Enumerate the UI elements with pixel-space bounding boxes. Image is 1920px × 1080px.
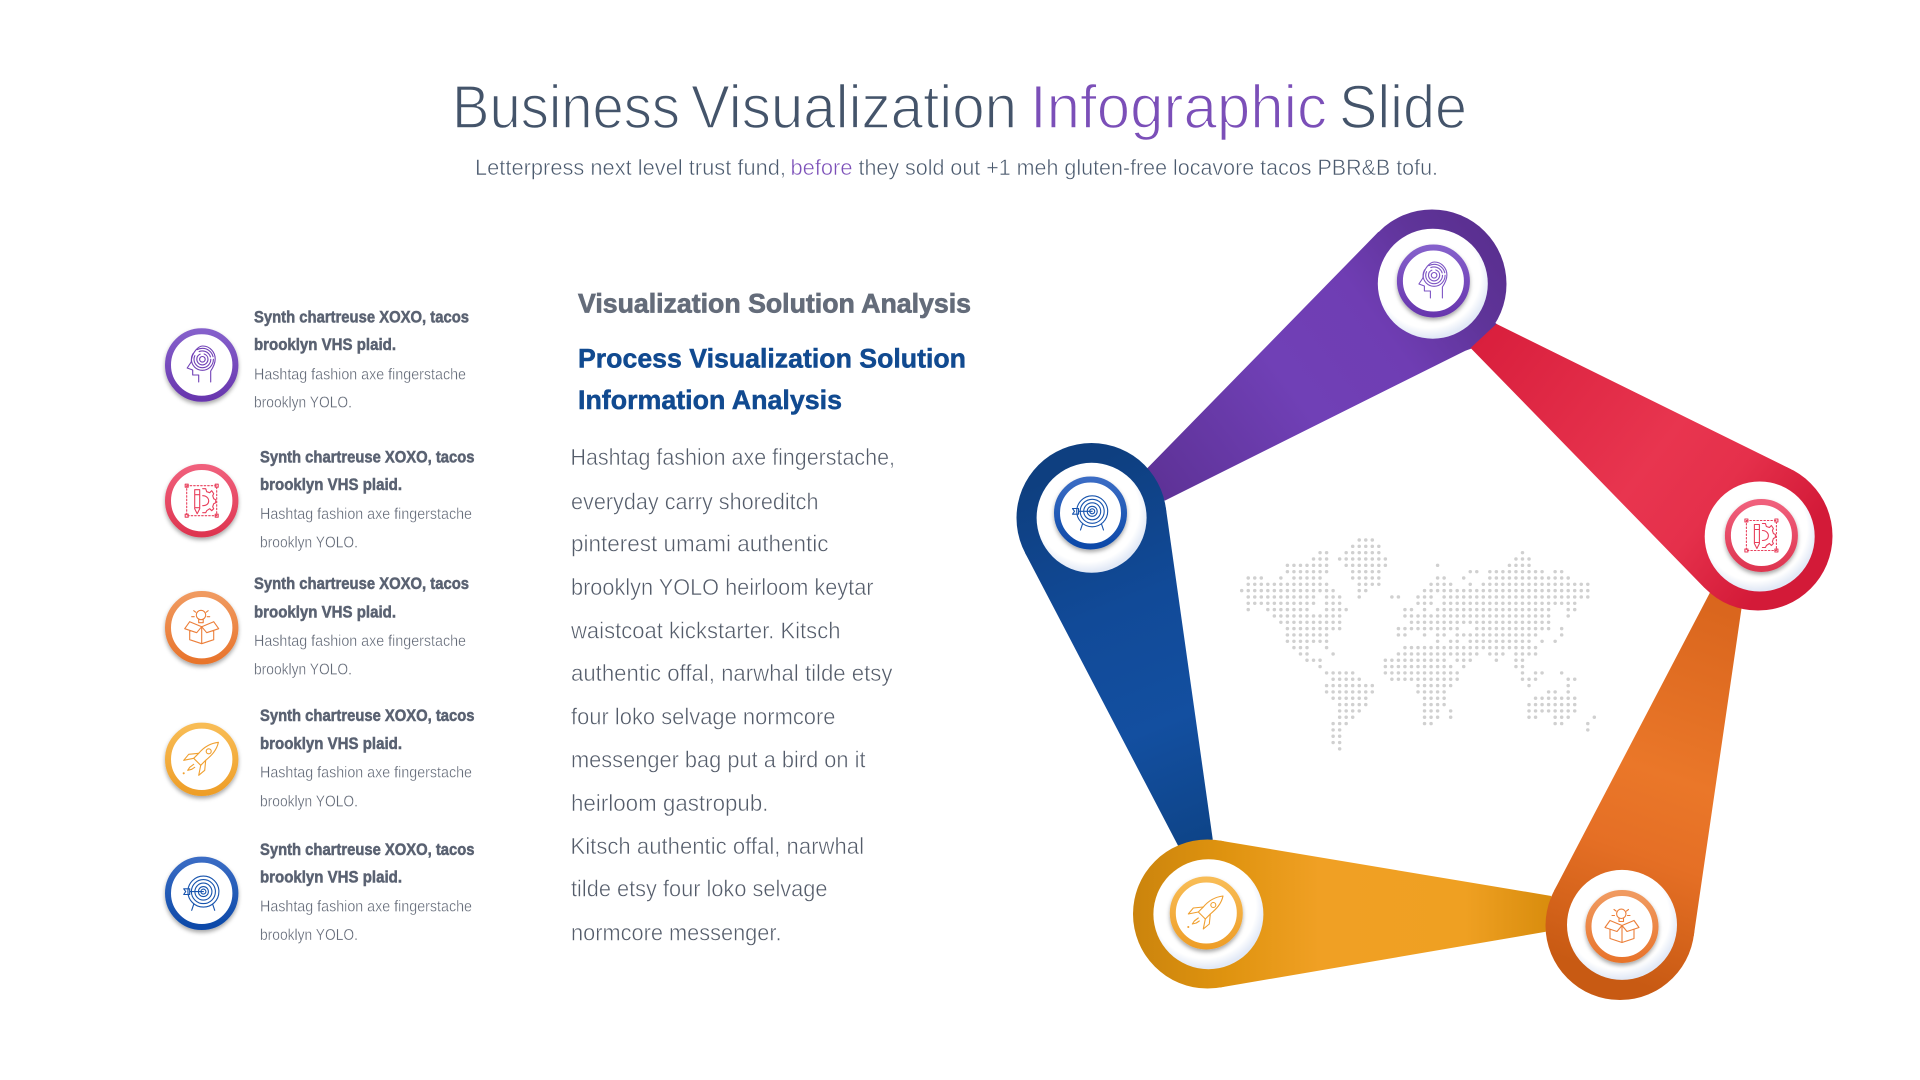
text block: body paragraph: Kitsch authentic offal, narwhal	[570, 833, 864, 859]
dotted world map	[1242, 540, 1595, 749]
band: purple	[1147, 210, 1506, 501]
list item 5: blue target: brooklyn VHS plaid.	[260, 869, 402, 887]
text block: body paragraph: four loko selvage normcore	[571, 703, 836, 729]
list item 4: gold rocket: brooklyn VHS plaid.	[260, 735, 402, 753]
list item 5: blue target: Hashtag fashion axe fingerstache	[260, 899, 472, 916]
list item 4: gold rocket: brooklyn YOLO.	[260, 794, 358, 811]
list item 5: blue target	[168, 841, 474, 944]
subtitle	[475, 155, 1438, 180]
text block: body paragraph	[570, 444, 895, 946]
text block: body paragraph: waistcoat kickstarter. Kitsch	[570, 617, 840, 643]
text block: body paragraph: Hashtag fashion axe fingerstache,	[570, 444, 895, 470]
heading: analysis: Visualization Solution Analysis	[578, 288, 971, 318]
list item 4: gold rocket: Synth chartreuse XOXO, tacos	[260, 707, 474, 725]
band: orange	[1546, 592, 1742, 1000]
list item 5: blue target: Synth chartreuse XOXO, tacos	[260, 841, 474, 859]
list item 4: gold rocket: Hashtag fashion axe fingerstache	[260, 765, 472, 782]
list item 2: red pencil and gear: Synth chartreuse XOXO, tacos	[260, 448, 474, 466]
list item 1: purple head: brooklyn VHS plaid.	[254, 336, 396, 354]
panel: feature list	[168, 308, 474, 944]
list item 3: orange box with bulb: brooklyn YOLO.	[254, 661, 352, 678]
heading: process: Information Analysis	[578, 385, 842, 415]
heading: process	[578, 344, 966, 415]
text block: body paragraph: heirloom gastropub.	[571, 790, 768, 816]
title	[452, 73, 1467, 141]
list item 4: gold rocket	[168, 707, 474, 811]
list item 1: purple head	[168, 308, 469, 412]
list item 5: blue target: brooklyn YOLO.	[260, 927, 358, 944]
text block: body paragraph: authentic offal, narwhal tilde etsy	[571, 660, 893, 686]
list item 3: orange box with bulb	[168, 575, 469, 678]
list item 1: purple head: brooklyn YOLO.	[254, 395, 352, 412]
band: gold	[1133, 840, 1551, 988]
title: Slide	[1339, 73, 1467, 141]
band: blue	[1016, 443, 1213, 846]
text block: body paragraph: normcore messenger.	[571, 920, 782, 946]
list item 3: orange box with bulb: brooklyn VHS plaid.	[254, 603, 396, 621]
title: Infographic	[1030, 73, 1327, 141]
text block: body paragraph: pinterest umami authentic	[571, 531, 829, 557]
band: red	[1471, 324, 1832, 610]
title: Visualization	[691, 73, 1017, 141]
text block: body paragraph: everyday carry shoreditch	[571, 488, 818, 514]
subtitle: they sold out +1 meh gluten-free locavore tacos PBR&B tofu.	[858, 155, 1438, 180]
text block: body paragraph: tilde etsy four loko selvage	[571, 876, 828, 902]
list item 1: purple head: Hashtag fashion axe fingerstache	[254, 366, 466, 383]
list item 2: red pencil and gear: brooklyn YOLO.	[260, 535, 358, 552]
subtitle: Letterpress next level trust fund,	[475, 155, 786, 180]
list item 1: purple head: Synth chartreuse XOXO, tacos	[254, 308, 469, 326]
list item 2: red pencil and gear: Hashtag fashion axe fingerstache	[260, 506, 472, 523]
text block: body paragraph: messenger bag put a bird on it	[571, 747, 866, 773]
text block: body paragraph: brooklyn YOLO heirloom keytar	[571, 574, 874, 600]
list item 2: red pencil and gear	[168, 448, 474, 552]
title: Business	[452, 73, 680, 141]
list item 2: red pencil and gear: brooklyn VHS plaid.	[260, 476, 402, 494]
heading: process: Process Visualization Solution	[578, 344, 966, 374]
list item 3: orange box with bulb: Hashtag fashion axe fingerstache	[254, 633, 466, 650]
list item 3: orange box with bulb: Synth chartreuse XOXO, tacos	[254, 575, 469, 593]
chart: pentagon cycle	[1016, 210, 1832, 1000]
subtitle: before	[790, 155, 852, 180]
